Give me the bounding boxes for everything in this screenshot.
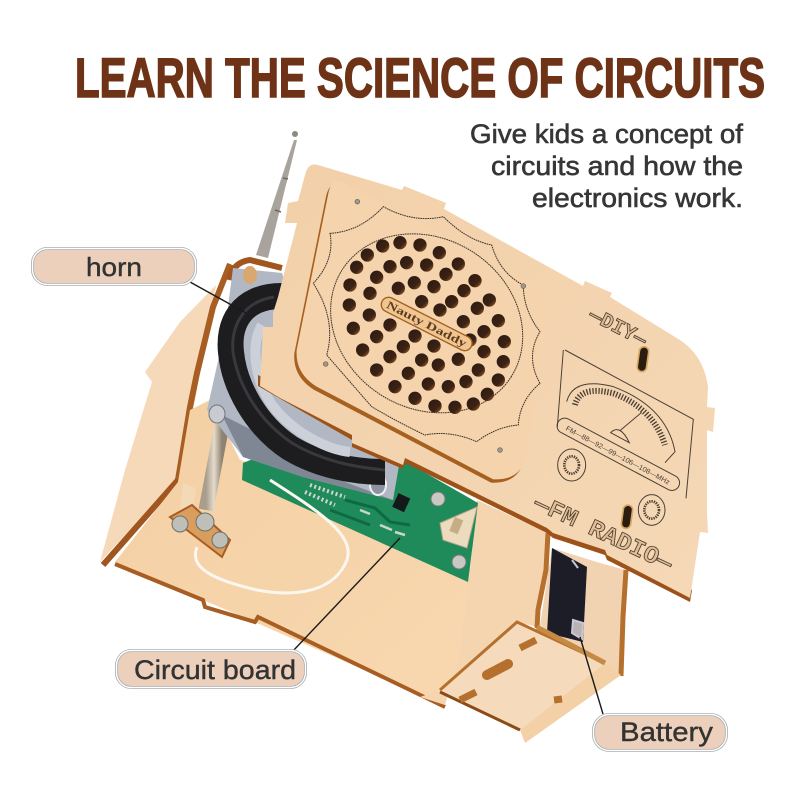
plate face xyxy=(260,164,715,598)
battery xyxy=(537,533,626,676)
telescopic rod and bracket xyxy=(170,425,230,557)
intro text: Give kids a concept of xyxy=(470,119,744,149)
intro text: electronics work. xyxy=(532,183,743,213)
logo badge: Nauty Daddy xyxy=(384,299,469,350)
DIY label: —DIY— xyxy=(584,304,651,353)
panel screws xyxy=(323,199,526,452)
speaker panel xyxy=(294,181,547,483)
speaker grille holes xyxy=(343,236,511,414)
tuning slots xyxy=(621,346,649,529)
side wall xyxy=(100,264,230,565)
logo badge xyxy=(379,295,475,353)
leader line: horn xyxy=(190,282,246,313)
back wall xyxy=(420,500,548,705)
label: horn xyxy=(32,248,196,284)
label: circuit board: Circuit board xyxy=(134,655,296,685)
label: circuit board xyxy=(116,650,306,688)
engraved details in plate xyxy=(294,181,693,579)
intro text: circuits and how the xyxy=(491,151,743,181)
speaker horn xyxy=(207,260,400,500)
antenna xyxy=(256,131,298,258)
floor panel xyxy=(115,400,470,705)
FM RADIO label: —FM RADIO— xyxy=(528,490,677,579)
frequency scale: FM—88—92—99—106—108—MHz xyxy=(564,425,671,487)
white antenna wire xyxy=(195,480,348,593)
label: battery xyxy=(594,714,726,750)
floor bottom edge xyxy=(115,564,445,707)
label: horn: horn xyxy=(86,252,142,282)
leader line: circuit board xyxy=(292,538,400,652)
radio kit illustration xyxy=(100,131,715,743)
sunburst outline xyxy=(313,207,540,442)
radio dial engraving xyxy=(554,350,693,525)
front compartment xyxy=(440,622,621,743)
plate edge xyxy=(258,375,692,602)
circuit board xyxy=(242,440,478,582)
label: battery: Battery xyxy=(620,717,714,747)
intro text xyxy=(470,119,744,213)
leader line: battery xyxy=(580,637,603,714)
front plate xyxy=(258,164,715,602)
